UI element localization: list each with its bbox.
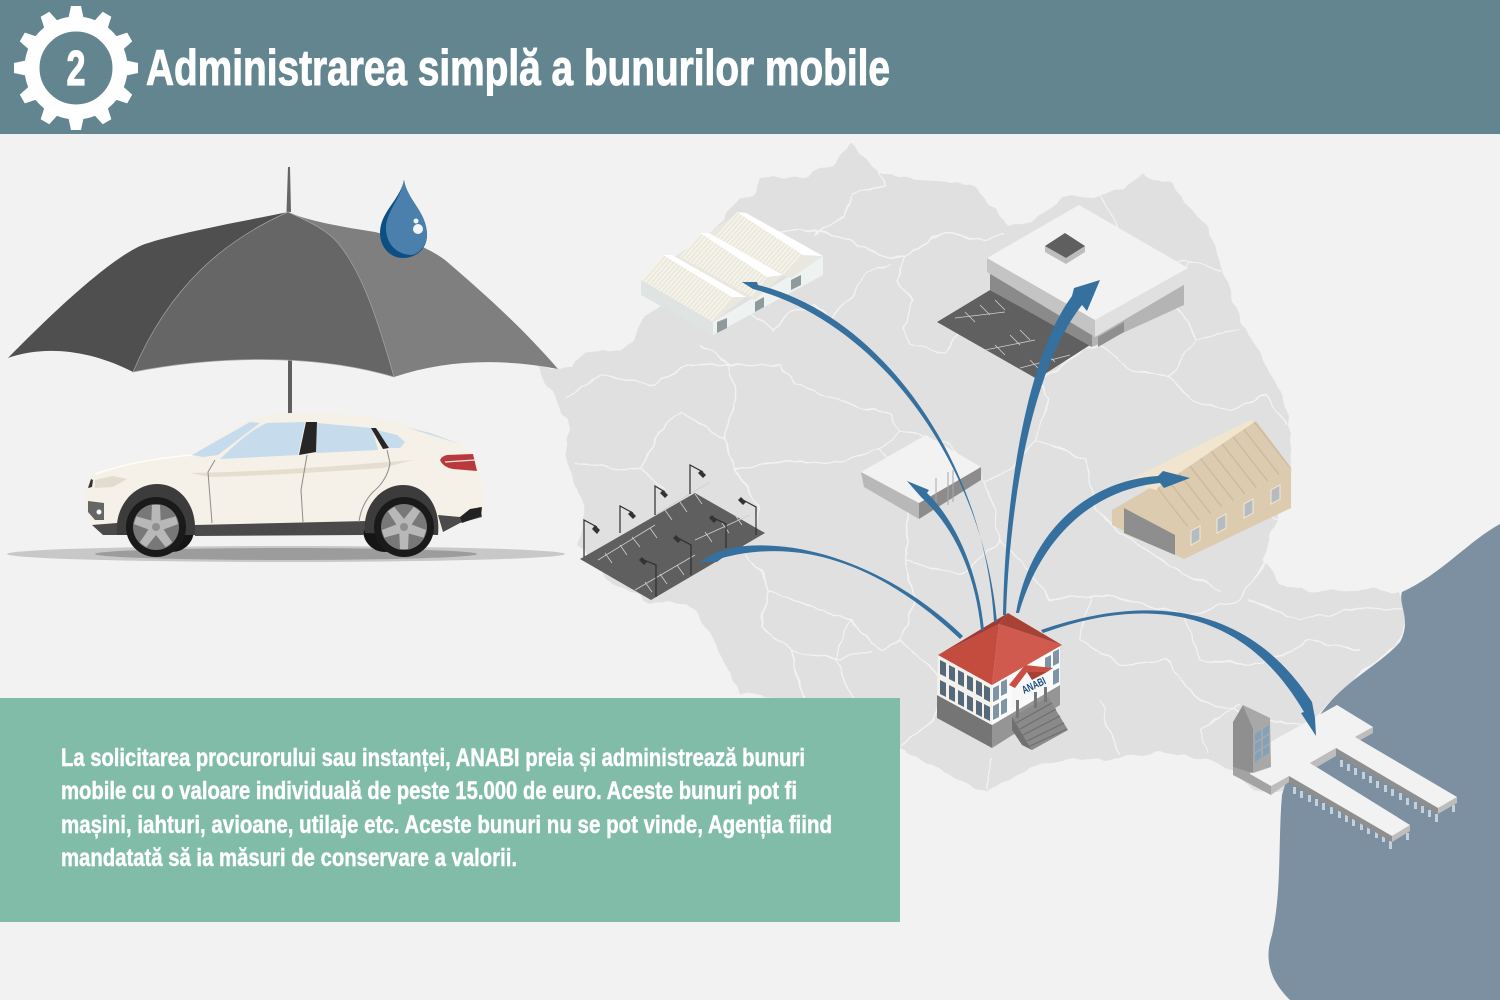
main roof — [938, 613, 1062, 685]
umbrella panel middle — [133, 212, 394, 377]
windshield — [192, 422, 260, 457]
walls — [937, 655, 992, 725]
port building — [1233, 705, 1253, 773]
house walls — [1112, 468, 1291, 559]
body text: mandatată să ia măsuri de conservare a valorii. — [61, 844, 517, 872]
ANABI label: ANABI — [1020, 675, 1048, 697]
warehouse — [641, 212, 823, 335]
gear icon with number 2 — [14, 6, 138, 130]
right windows — [993, 649, 1059, 720]
umbrella tip — [286, 167, 291, 212]
roof light strip — [1125, 420, 1258, 490]
small building — [861, 435, 981, 519]
front bumper — [92, 523, 117, 535]
arrow to large building — [1003, 280, 1100, 615]
lower body — [990, 270, 1092, 347]
text panel — [0, 698, 900, 922]
warehouse roof bays — [641, 255, 732, 322]
tail light — [440, 454, 477, 471]
car — [7, 413, 565, 562]
warehouse walls — [641, 280, 713, 335]
parking lot with lights — [580, 465, 765, 600]
port building windows — [1255, 725, 1269, 762]
large building with parking — [937, 205, 1188, 379]
lot markings — [598, 482, 750, 592]
umbrella — [8, 167, 558, 414]
wheel rear — [365, 485, 438, 557]
roof slab sides — [987, 258, 1095, 337]
pier sides — [1289, 748, 1438, 842]
body text: La solicitarea procurorului sau instanței, ANABI preia și administrează bunuri — [61, 744, 805, 772]
house windows — [1191, 485, 1280, 545]
garage door — [1124, 508, 1175, 555]
columns — [1016, 687, 1047, 718]
left windows — [940, 660, 990, 721]
umbrella panel left — [8, 212, 288, 372]
parking — [937, 290, 1090, 379]
far wheels — [150, 508, 194, 552]
header bar — [0, 0, 1500, 134]
rear screen — [405, 427, 460, 444]
port pier — [1233, 705, 1457, 849]
house — [1112, 420, 1291, 559]
body text: mobile cu o valoare individuală de peste 15.000 de euro. Aceste bunuri pot fi — [61, 777, 797, 805]
map of Romania — [535, 145, 1408, 792]
wheel front — [117, 484, 195, 557]
pillars — [299, 422, 389, 455]
rear bumper — [438, 507, 482, 532]
ANABI building — [937, 613, 1068, 750]
sea — [1268, 524, 1500, 1000]
county borders — [565, 170, 1400, 790]
vent — [1045, 246, 1085, 264]
arrow to warehouse — [742, 282, 997, 622]
warehouse doors — [717, 275, 801, 333]
grille — [88, 501, 104, 520]
pier deck — [1250, 705, 1457, 836]
gear icon with number 2: 2 — [66, 42, 86, 96]
hood highlight — [95, 455, 192, 474]
warehouse gables — [641, 215, 823, 322]
car shadow — [7, 546, 565, 562]
side windows — [220, 422, 405, 459]
head light — [95, 476, 127, 488]
portico roof — [1009, 665, 1053, 688]
lower skirt — [195, 521, 367, 536]
arrow to small building — [907, 481, 984, 630]
body text — [61, 744, 832, 872]
roof — [1157, 421, 1291, 527]
arrow to port — [1041, 610, 1316, 736]
pier pillars — [1293, 760, 1455, 849]
lot surface — [580, 493, 765, 600]
arrow to house — [1016, 471, 1190, 613]
crease — [190, 460, 413, 477]
car body — [85, 413, 483, 533]
umbrella panel right — [288, 212, 558, 377]
base — [937, 695, 992, 748]
title: Administrarea simplă a bunurilor mobile — [146, 40, 890, 96]
portico — [1012, 668, 1050, 708]
warehouse ridges — [663, 212, 823, 297]
roof — [987, 205, 1188, 320]
umbrella pole — [288, 360, 292, 414]
exhaust — [460, 507, 482, 523]
parking marks — [955, 300, 1070, 370]
lights — [584, 465, 756, 597]
arrow to parking lot — [700, 545, 963, 639]
door lines — [208, 450, 390, 523]
steps — [1012, 697, 1068, 750]
water drop — [380, 180, 427, 258]
body text: mașini, iahturi, avioane, utilaje etc. Aceste bunuri nu se pot vinde, Agenția fiind — [61, 811, 832, 839]
